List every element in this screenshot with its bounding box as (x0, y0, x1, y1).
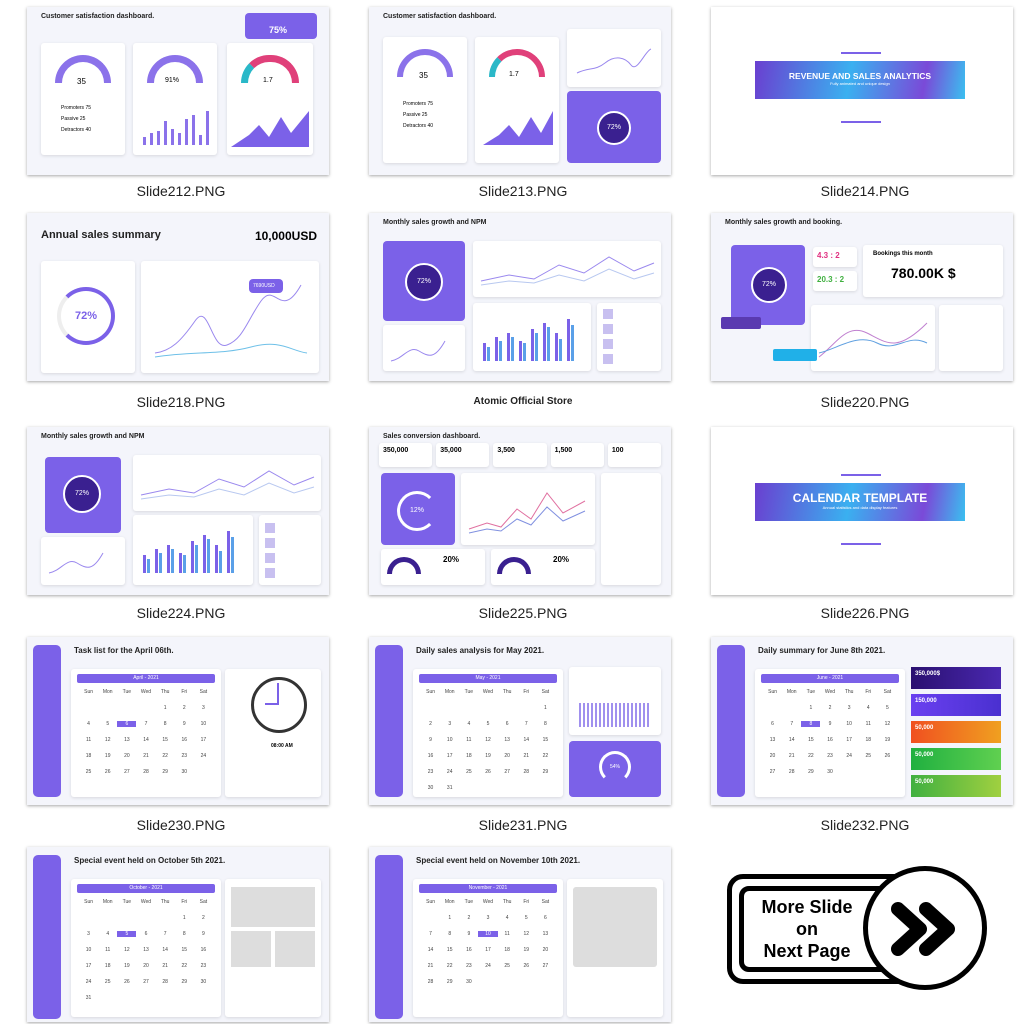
slide 218 (27, 213, 329, 381)
slide 230: 3 (202, 705, 205, 711)
slide 220: 20.3 : 2 (817, 275, 844, 284)
slide october: 1 (183, 915, 186, 921)
slide october: 9 (202, 931, 205, 937)
slide november: 10 (485, 931, 491, 937)
slide 225: 12% (410, 507, 424, 514)
slide october: 2 (202, 915, 205, 921)
slide 212: 91% (165, 77, 179, 84)
slide 230: Sun (84, 689, 93, 695)
slide 232: 26 (885, 753, 890, 759)
slide 220 (711, 213, 1013, 381)
slide november: 27 (543, 963, 548, 969)
slide 231: 14 (523, 737, 529, 743)
slide october: 6 (145, 931, 147, 937)
slide november: Tue (465, 899, 473, 905)
slide 230: 17 (201, 737, 206, 743)
slide 225: 100 (612, 447, 624, 454)
slide 231: 12 (485, 737, 491, 743)
slide 214: Fully animated and unique design (830, 81, 890, 86)
slide 232: Fri (865, 689, 871, 695)
slide 230: 15 (162, 737, 168, 743)
slide november: 3 (487, 915, 489, 921)
slide november: 9 (467, 931, 470, 937)
label 218: Slide218.PNG (137, 394, 225, 410)
slide 220: 4.3 : 2 (817, 251, 840, 260)
slide 232: 25 (865, 753, 871, 759)
slide 232: 24 (846, 753, 852, 759)
slide 230: Sat (200, 689, 207, 695)
slide 212: 1.7 (263, 77, 273, 84)
slide 231: 5 (487, 721, 489, 727)
slide 214 (711, 7, 1013, 175)
slide 218: 72% (75, 310, 97, 322)
slide october: 27 (143, 979, 149, 985)
slide 224: Monthly sales growth and NPM (41, 433, 144, 440)
slide 232: 6 (771, 721, 774, 727)
slide november: 23 (466, 963, 472, 969)
slide 231: 19 (485, 753, 491, 759)
slide 231: Wed (483, 689, 493, 695)
slide 231: 28 (523, 769, 529, 775)
slide november: 25 (504, 963, 510, 969)
slide 232: 11 (866, 721, 871, 727)
slide 230: 2 (183, 705, 186, 711)
label 232: Slide232.PNG (821, 817, 909, 833)
slide 230: Mon (103, 689, 113, 695)
slide 230: 30 (181, 769, 187, 775)
slide 232: Mon (787, 689, 797, 695)
slide 226: CALENDAR TEMPLATE (793, 491, 927, 505)
slide 231: 15 (543, 737, 548, 743)
slide 231: 9 (429, 737, 432, 743)
icon: double chevron circle (863, 866, 987, 990)
label 231: Slide231.PNG (479, 817, 567, 833)
slide 232: Sat (884, 689, 891, 695)
slide november: 7 (429, 931, 432, 937)
slide 232: 150,000 (915, 698, 937, 704)
slide november: 8 (448, 931, 451, 937)
slide october: 29 (181, 979, 187, 985)
slide 231: 10 (447, 737, 452, 743)
slide 230: 4 (87, 721, 90, 727)
slide 232: 12 (885, 721, 890, 727)
slide 232: 50,000 (915, 779, 933, 785)
slide 212: 75% (269, 25, 287, 35)
slide 231: 16 (428, 753, 433, 759)
slide 232: 21 (789, 753, 794, 759)
slide october: Mon (103, 899, 113, 905)
slide 219: 72% (417, 278, 431, 285)
slide 231: 27 (504, 769, 510, 775)
slide november: November - 2021 (469, 885, 507, 891)
slide 230: 10 (201, 721, 206, 727)
slide 230: 9 (183, 721, 186, 727)
slide 230: 23 (181, 753, 187, 759)
slide october: 16 (201, 947, 206, 953)
slide 230: April - 2021 (133, 675, 159, 681)
slide november: Thu (503, 899, 511, 905)
slide october: 20 (143, 963, 149, 969)
slide 231: Thu (503, 689, 511, 695)
slide 232 (711, 637, 1013, 805)
slide 232: 17 (846, 737, 852, 743)
slide 230: 18 (86, 753, 91, 759)
slide 232: Sun (768, 689, 777, 695)
slide 231: 2 (429, 721, 432, 727)
slide 220: Monthly sales growth and booking. (725, 219, 842, 226)
slide november: 11 (505, 931, 510, 937)
slide november: 15 (447, 947, 452, 953)
slide october: 22 (181, 963, 187, 969)
slide 213: Detractors 40 (403, 123, 433, 129)
slide november: 14 (428, 947, 433, 953)
slide october: 18 (105, 963, 110, 969)
slide october: 5 (125, 931, 128, 937)
slide 213: Promoters 75 (403, 101, 433, 107)
slide november: 19 (523, 947, 529, 953)
slide 231: 21 (523, 753, 529, 759)
slide november (369, 847, 671, 1022)
slide 232: 350,000$ (915, 671, 940, 677)
slide november: 13 (543, 931, 548, 937)
slide 226 (711, 427, 1013, 595)
slide october: Thu (161, 899, 169, 905)
slide 212: Promoters 75 (61, 105, 91, 111)
button: more slide on next page: More Slide (761, 897, 853, 917)
button: more slide on next page: on (796, 919, 818, 939)
slide 230: 1 (164, 705, 167, 711)
slide 230: 29 (162, 769, 168, 775)
slide 230: 12 (105, 737, 110, 743)
label 230: Slide230.PNG (137, 817, 225, 833)
slide 231: 13 (504, 737, 510, 743)
slide october: 31 (86, 995, 91, 1001)
slide 232: 3 (848, 705, 851, 711)
slide 232: 18 (865, 737, 871, 743)
slide november: Mon (445, 899, 455, 905)
slide november: 24 (485, 963, 491, 969)
label 214: Slide214.PNG (821, 183, 909, 199)
slide november: Fri (523, 899, 529, 905)
slide 219: Monthly sales growth and NPM (383, 219, 486, 226)
slide 231: 54% (610, 764, 620, 770)
slide 213: 1.7 (509, 71, 519, 78)
slide 232: 9 (829, 721, 831, 727)
slide 231: 1 (544, 705, 547, 711)
slide 213: 72% (607, 124, 621, 131)
slide 230: 08:00 AM (271, 743, 293, 749)
slide november: 29 (447, 979, 452, 985)
slide october: 30 (201, 979, 206, 985)
slide 231: Sat (542, 689, 549, 695)
slide 231: 17 (447, 753, 452, 759)
slide 225: 20% (443, 555, 459, 564)
slide 232: 19 (885, 737, 890, 743)
slide 231: 29 (543, 769, 548, 775)
slide 232: 29 (808, 769, 814, 775)
slide october: 15 (181, 947, 187, 953)
slide november: 20 (543, 947, 548, 953)
slide 231: 7 (525, 721, 528, 727)
slide 231: 30 (428, 785, 433, 791)
slide 232: 20 (770, 753, 775, 759)
slide october: Tue (123, 899, 131, 905)
slide 213: 35 (419, 71, 428, 80)
slide 230: 25 (86, 769, 91, 775)
slide october: Sat (200, 899, 207, 905)
slide 220: Bookings this month (873, 251, 933, 257)
slide 214: REVENUE AND SALES ANALYTICS (789, 71, 931, 81)
slide 231: 20 (504, 753, 510, 759)
slide 232: 4 (867, 705, 870, 711)
slide 230: Wed (141, 689, 151, 695)
slide 213 (369, 7, 671, 175)
slide october: 28 (162, 979, 168, 985)
slide 230: 26 (105, 769, 110, 775)
slide 230: 5 (106, 721, 109, 727)
slide 232: 14 (789, 737, 794, 743)
slide october: 17 (86, 963, 91, 969)
slide 231: 11 (466, 737, 471, 743)
slide 220: 780.00K $ (891, 265, 956, 281)
slide october: 25 (105, 979, 110, 985)
slide 225: 1,500 (555, 447, 572, 454)
slide 225: 20% (553, 555, 569, 564)
slide november: 4 (506, 915, 509, 921)
slide october: 11 (105, 947, 110, 953)
slide 231: Daily sales analysis for May 2021. (416, 646, 544, 655)
slide 232: Thu (845, 689, 853, 695)
slide 232: 1 (809, 705, 812, 711)
slide 232: 2 (829, 705, 831, 711)
slide november: 26 (523, 963, 529, 969)
slide 230: Thu (161, 689, 169, 695)
slide october: 3 (87, 931, 90, 937)
slide october: 24 (86, 979, 91, 985)
slide october: 19 (124, 963, 130, 969)
slide october: 14 (162, 947, 168, 953)
slide 232: Wed (825, 689, 835, 695)
slide 226: Annual statistics and data display features (823, 505, 897, 510)
slide 232: Tue (807, 689, 815, 695)
slide 230: 14 (143, 737, 149, 743)
slide 231: Mon (445, 689, 455, 695)
slide 232: Daily summary for June 8th 2021. (758, 646, 885, 655)
slide november: Special event held on November 10th 2021. (416, 856, 580, 865)
label 220: Slide220.PNG (821, 394, 909, 410)
slide 212: Detractors 40 (61, 127, 91, 133)
label 225: Slide225.PNG (479, 605, 567, 621)
slide 230: 24 (201, 753, 206, 759)
slide 231: May - 2021 (475, 675, 500, 681)
slide 231: 6 (506, 721, 509, 727)
label 219: Atomic Official Store (474, 396, 572, 407)
slide 231: 18 (466, 753, 472, 759)
slide 231: 26 (485, 769, 491, 775)
slide october: 13 (143, 947, 149, 953)
slide november: 1 (448, 915, 451, 921)
slide 231: 24 (447, 769, 452, 775)
slide october: Sun (84, 899, 93, 905)
slide 231: 4 (467, 721, 470, 727)
slide october: October - 2021 (129, 885, 163, 891)
slide 231: 23 (428, 769, 433, 775)
slide 225: 35,000 (440, 447, 462, 454)
slide 225 (369, 427, 671, 595)
slide 232: 23 (827, 753, 833, 759)
slide 232: June - 2021 (817, 675, 843, 681)
slide 231 (369, 637, 671, 805)
slide 212: 35 (77, 77, 86, 86)
slide 231: 3 (448, 721, 451, 727)
slide november: Sat (542, 899, 549, 905)
slide 230: Task list for the April 06th. (74, 646, 174, 655)
slide november: 16 (466, 947, 472, 953)
slide 224: 72% (75, 490, 89, 497)
slide 232: 50,000 (915, 725, 933, 731)
slide 232: 13 (770, 737, 775, 743)
slide october: 23 (201, 963, 206, 969)
slide october: 8 (183, 931, 186, 937)
slide 231: Tue (465, 689, 473, 695)
slide 230: Tue (123, 689, 131, 695)
slide 232: 5 (886, 705, 889, 711)
slide october: 4 (106, 931, 109, 937)
slide 225: 350,000 (383, 447, 408, 454)
slide 232: 30 (827, 769, 833, 775)
slide 232: 10 (846, 721, 852, 727)
slide october: Wed (141, 899, 151, 905)
slide october (27, 847, 329, 1022)
slide 231: 31 (447, 785, 452, 791)
slide 230: 7 (145, 721, 147, 727)
slide 231: Sun (426, 689, 435, 695)
slide 231: Fri (523, 689, 529, 695)
slide november: Sun (426, 899, 435, 905)
slide 232: 15 (808, 737, 814, 743)
slide november: 6 (544, 915, 547, 921)
slide 232: 16 (827, 737, 833, 743)
slide 218: 10,000USD (255, 229, 317, 243)
slide november: Wed (483, 899, 493, 905)
slide 232: 27 (770, 769, 775, 775)
label 224: Slide224.PNG (137, 605, 225, 621)
slide 218: 7690USD (253, 283, 275, 289)
slide 232: 50,000 (915, 752, 933, 758)
slide november: 18 (504, 947, 510, 953)
slide 232: 28 (789, 769, 794, 775)
slide 224 (27, 427, 329, 595)
slide 230: 11 (86, 737, 91, 743)
slide 212: Customer satisfaction dashboard. (41, 13, 154, 20)
label 213: Slide213.PNG (479, 183, 567, 199)
slide 212 (27, 7, 329, 175)
slide november: 5 (525, 915, 528, 921)
slide november: 30 (466, 979, 472, 985)
slide 219 (369, 213, 671, 381)
slide october: Special event held on October 5th 2021. (74, 856, 225, 865)
slide 230: 8 (164, 721, 167, 727)
slide 230: 22 (162, 753, 168, 759)
slide november: 17 (485, 947, 491, 953)
button: more slide on next page: Next Page (763, 941, 851, 961)
slide november: 2 (467, 915, 470, 921)
slide october: 10 (86, 947, 91, 953)
slide 230: Fri (181, 689, 187, 695)
label 212: Slide212.PNG (137, 183, 225, 199)
button: more slide on next page (727, 866, 987, 990)
slide 230: 6 (125, 721, 128, 727)
slide october: Fri (181, 899, 187, 905)
slide 218: Annual sales summary (41, 229, 161, 241)
slide 231: 25 (466, 769, 472, 775)
slide 232: 7 (790, 721, 793, 727)
slide 232: 22 (808, 753, 814, 759)
slide 230: 16 (181, 737, 187, 743)
slide 213: Passive 25 (403, 112, 427, 118)
slide 231: 22 (543, 753, 548, 759)
slide 212: Passive 25 (61, 116, 85, 122)
slide november: 22 (447, 963, 452, 969)
slide 230: 20 (124, 753, 130, 759)
slide october: 12 (124, 947, 130, 953)
slide 213: Customer satisfaction dashboard. (383, 13, 496, 20)
slide 230: 27 (124, 769, 130, 775)
slide october: 26 (124, 979, 130, 985)
slide november: 21 (428, 963, 433, 969)
slide 230 (27, 637, 329, 805)
slide 232: 8 (809, 721, 812, 727)
slide 230: 13 (124, 737, 130, 743)
slide november: 12 (523, 931, 529, 937)
slide october: 7 (164, 931, 167, 937)
slide 230: 19 (105, 753, 110, 759)
slide october: 21 (162, 963, 168, 969)
slide 230: 28 (143, 769, 149, 775)
slide 225: 3,500 (497, 447, 515, 454)
slide 220: 72% (762, 281, 776, 288)
slide 225: Sales conversion dashboard. (383, 433, 480, 440)
label 226: Slide226.PNG (821, 605, 909, 621)
slide november: 28 (428, 979, 433, 985)
slide 231: 8 (544, 721, 547, 727)
slide 230: 21 (143, 753, 149, 759)
